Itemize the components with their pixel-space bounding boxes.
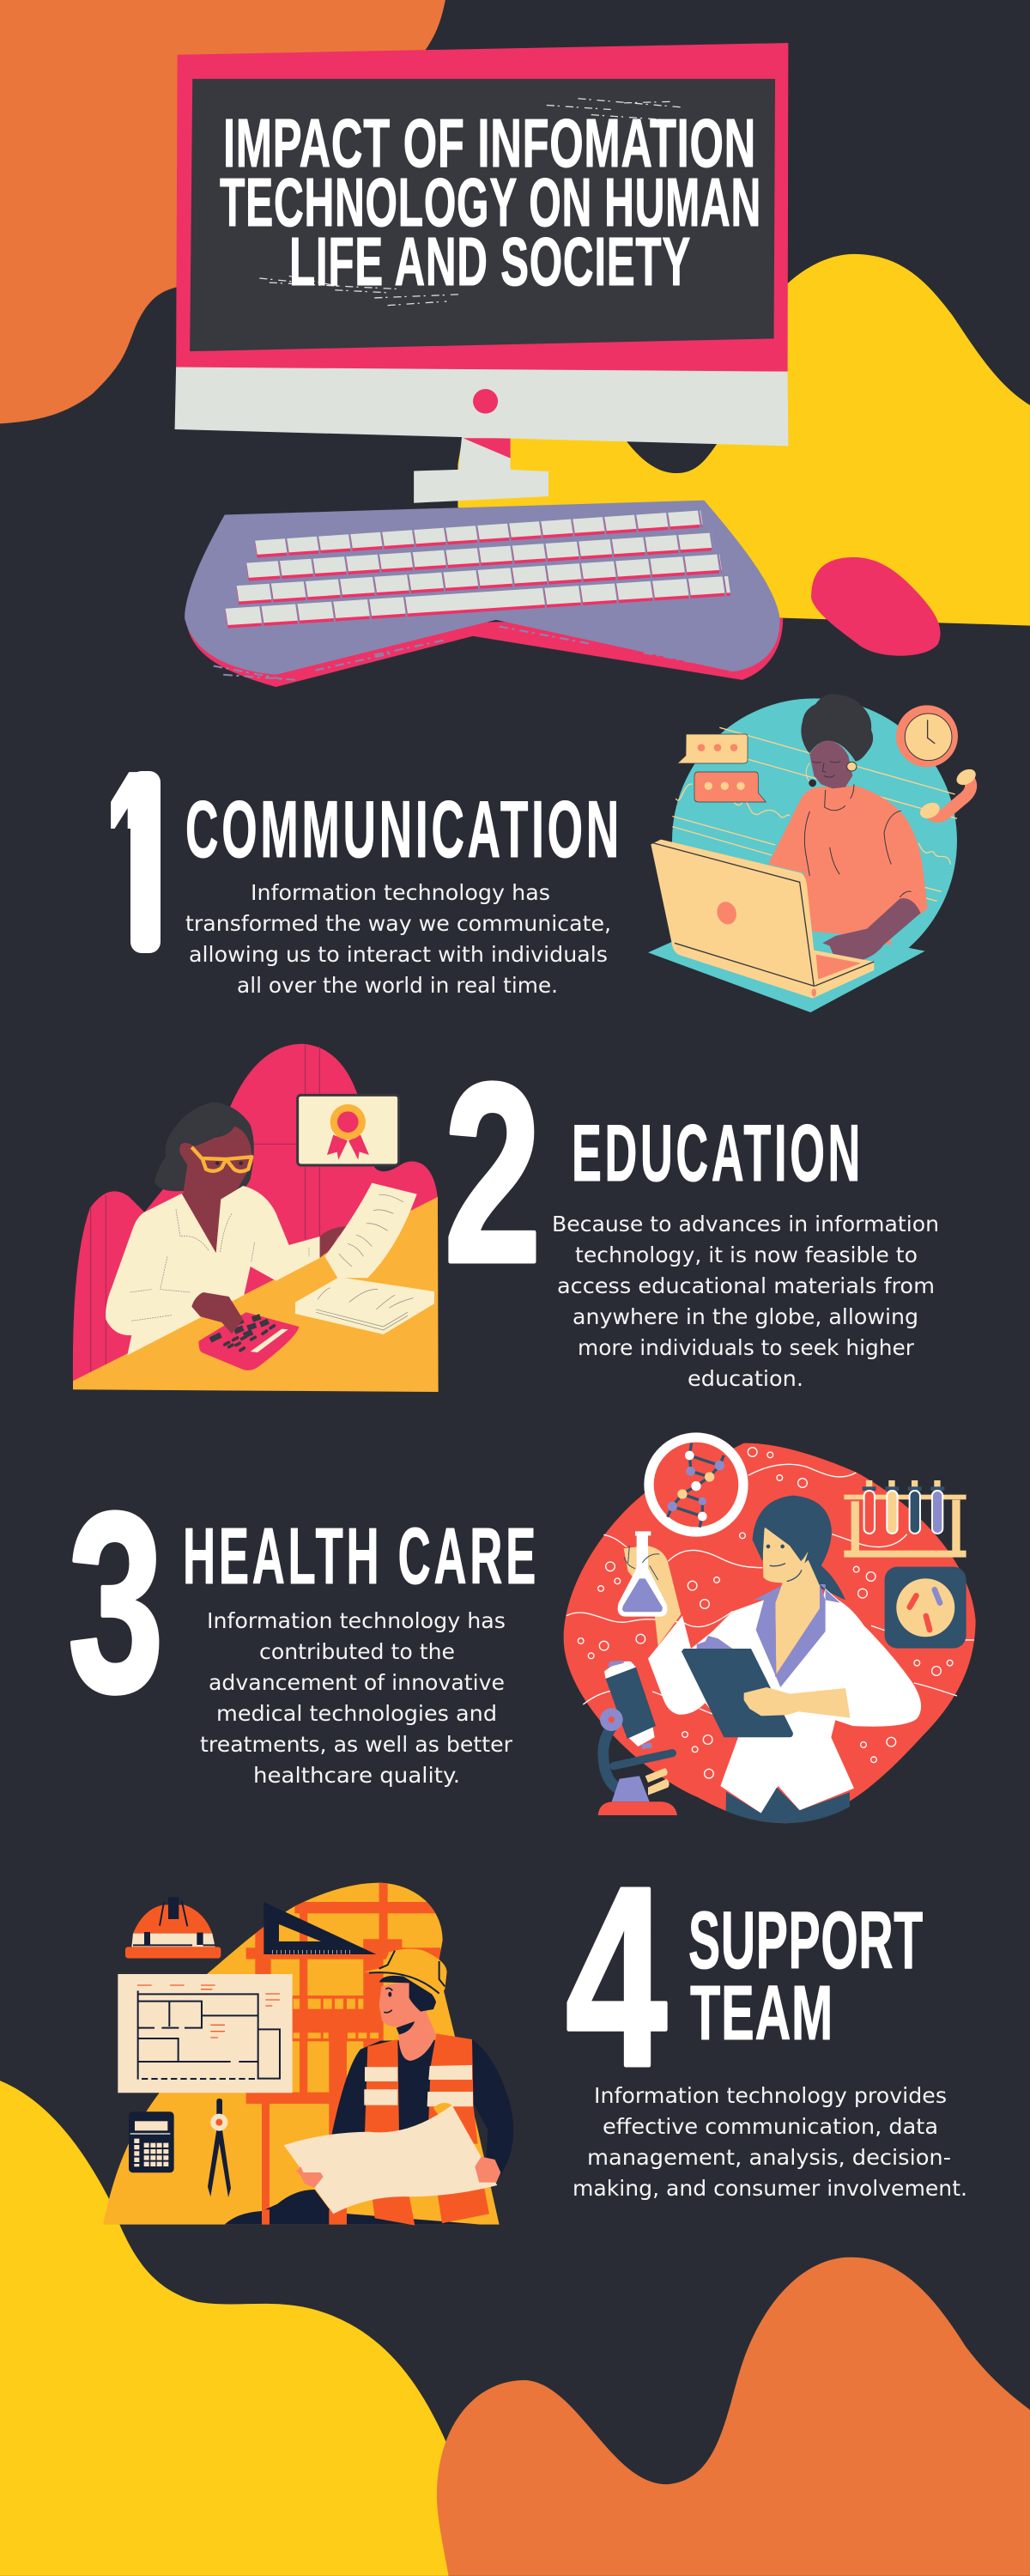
hair fringe [753,1511,821,1561]
hand on calculator [191,1292,243,1334]
flask [618,1531,667,1617]
shirt stitching [130,1209,309,1321]
body text [185,880,611,998]
raised arm [624,1546,681,1646]
face details [770,1564,802,1582]
body text: Information technology has [251,880,550,905]
body text [200,1608,513,1788]
clipboard [682,1636,793,1737]
teal backdrop [648,698,957,1012]
telephone [918,766,978,822]
heading: support team: TEAM [690,1971,833,2057]
number 2: 2 [444,1030,542,1316]
trousers [726,1788,850,1823]
ear and face details [384,1987,421,2013]
heading: support team [688,1895,924,2057]
number 3: 3 [68,1460,164,1746]
forearm [744,1687,851,1718]
mouse [811,557,941,656]
clock [896,705,958,767]
compass tool [208,2099,231,2197]
rosette [330,1104,366,1139]
dark notch under monitor [624,438,719,473]
desk [73,1197,439,1392]
face [809,741,852,788]
stand accent [464,438,511,459]
body text: allowing us to interact with individuals [189,942,608,967]
section 3: health care [68,1460,539,1788]
illustration: woman with calculator [73,1044,439,1392]
body text: transformed the way we communicate, [185,911,611,936]
pink backdrop [73,1044,438,1388]
hair [379,1976,438,2012]
microscope [598,1661,677,1815]
yellow blob bottom left [0,2081,450,2576]
keyboard shadow [187,617,783,687]
body text: effective communication, data [603,2114,938,2139]
calculator [129,2111,174,2172]
decorative lines [672,727,957,901]
body text [573,2083,967,2201]
face details [806,762,840,782]
body text: treatments, as well as better [200,1732,513,1757]
power button [473,389,498,414]
hands [296,2157,500,2188]
yellow blob top right [457,254,1030,626]
test tube rack [844,1480,966,1558]
certificate [298,1095,399,1165]
body text: medical technologies and [216,1701,497,1726]
monitor stand [414,437,548,503]
body text [552,1212,939,1391]
body text: access educational materials from [557,1273,935,1298]
coat collar [754,1584,840,1687]
number 1 [111,771,161,953]
heading: communication: COMMUNICATION [185,784,622,874]
blueprint [118,1974,293,2093]
body text: education. [688,1366,803,1391]
body text: Information technology has [207,1608,506,1633]
illustration: scientist [564,1437,976,1823]
title: LIFE AND SOCIETY [289,223,691,300]
DNA in ring [649,1437,743,1532]
red backdrop [564,1443,976,1823]
illustration: woman with laptop [648,694,978,1012]
ground silhouette [225,2190,481,2225]
headset and earring [809,762,857,787]
safety vest [364,2033,489,2226]
bubbles [578,1448,953,1778]
neck and head [379,1981,436,2061]
body text: advancement of innovative [209,1670,505,1695]
calculator [199,1312,299,1370]
orange blob top left [0,0,445,423]
body text: contributed to the [259,1639,455,1664]
face [762,1526,809,1583]
title scratches [259,99,683,306]
background blobs: top [0,0,1030,687]
hair [154,1102,254,1191]
monitor bezel [176,43,788,373]
number 4: 4 [566,1834,668,2120]
ribbons [327,1135,369,1160]
hard hat [125,1897,221,1959]
body text: Information technology provides [594,2083,947,2108]
monitor [175,43,788,503]
monitor screen [190,79,775,351]
window lines [91,1045,319,1372]
section 4: support team [566,1834,967,2201]
body text: management, analysis, decision- [587,2145,951,2170]
section 1: communication: 1 [105,718,161,1006]
body text: anywhere in the globe, allowing [573,1304,918,1329]
clothing lines [804,784,912,897]
helmet [363,1949,447,2003]
body text: healthcare quality. [253,1763,460,1788]
scaffold windows [294,1999,379,2038]
shirt [106,1186,320,1355]
keyboard shadow texture [214,627,723,680]
body text: more individuals to seek higher [578,1335,915,1360]
hand on paper [320,1226,354,1258]
monitor chin [175,368,788,446]
keyboard body [185,501,780,675]
glasses [191,1147,251,1171]
body text: technology, it is now feasible to [575,1242,918,1267]
eyes [215,1161,243,1165]
yellow backdrop [103,1883,500,2225]
section 1: communication [105,718,622,1006]
skin: face and neck [179,1127,253,1253]
set square [264,1902,376,1954]
body [768,786,928,945]
arms and shirt [332,2039,513,2175]
wavy lines [566,1464,974,1714]
scaffolding [246,1880,444,2225]
hand on clipboard [744,1687,798,1716]
key rows [227,518,729,620]
orange blob bottom right [437,2257,1030,2576]
hair back [753,1496,845,1600]
chat bubbles [677,734,766,802]
rolled plan [284,2103,497,2214]
section 2: education [444,1030,939,1391]
keyboard [185,501,783,687]
background blobs: bottom [0,2081,1030,2576]
arm [822,898,921,962]
jaw shadow [397,2021,415,2034]
paper sheet [324,1183,417,1278]
body text: making, and consumer involvement. [573,2176,967,2201]
open book [295,1277,434,1334]
body text: Because to advances in information [552,1212,939,1236]
skin: neck and chest [775,1560,820,1674]
lab coat [648,1589,921,1814]
scaffold post over ground [262,2209,347,2225]
laptop [651,840,874,999]
illustration: construction worker [103,1880,513,2226]
heading: health care: HEALTH CARE [183,1511,539,1601]
title [220,105,761,300]
petri dish [885,1567,966,1649]
hair [801,694,873,762]
body text: all over the world in real time. [237,973,558,998]
